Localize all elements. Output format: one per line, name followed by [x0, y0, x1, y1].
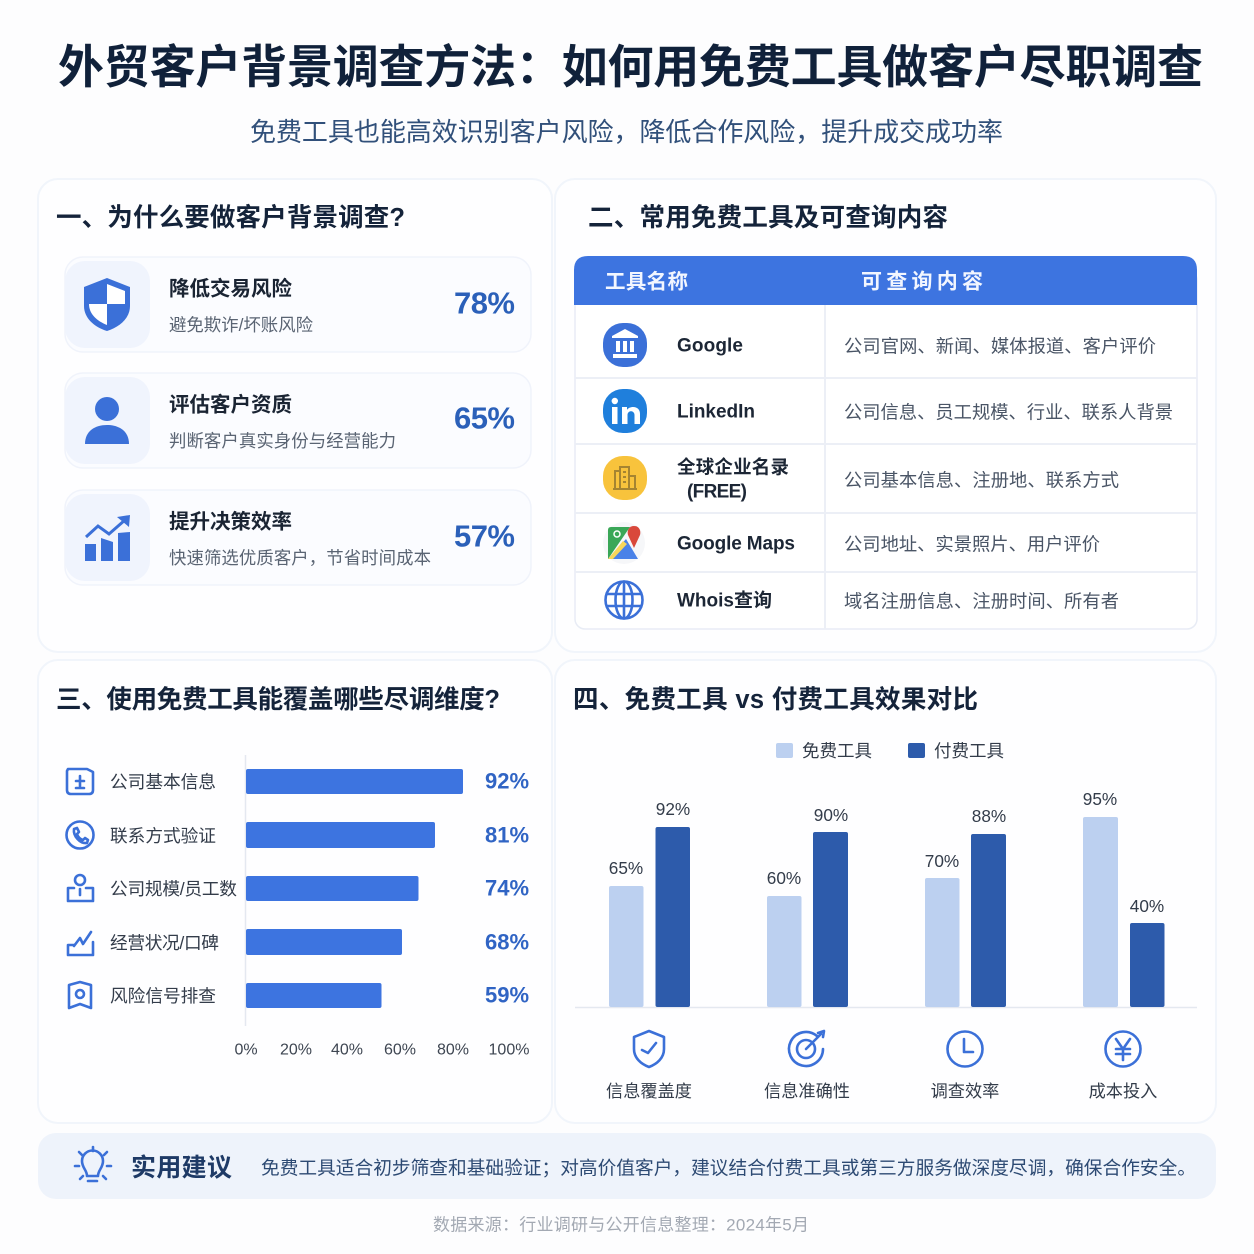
x axis labels	[234, 1042, 529, 1058]
x axis labels: 40%	[331, 1042, 363, 1058]
panel: due diligence coverage	[38, 660, 552, 1123]
grouped bar chart	[575, 789, 1197, 1008]
heading: section two: 二、常用免费工具及可查询内容	[588, 203, 948, 232]
x axis labels: 20%	[280, 1042, 312, 1058]
row: global directory: 公司基本信息、注册地、联系方式	[844, 470, 1119, 490]
bar: operations reputation	[68, 929, 529, 955]
legend: 免费工具	[802, 741, 872, 761]
table	[574, 256, 1197, 629]
card: reduce risk: 78%	[454, 286, 515, 320]
metric: cost	[1089, 1032, 1157, 1101]
bar: contact verification: 81%	[485, 822, 529, 848]
heading: section one: 一、为什么要做客户背景调查?	[56, 203, 405, 232]
card: assess qualification: 评估客户资质	[169, 392, 292, 416]
table: 可查询内容	[861, 270, 983, 294]
table: 工具名称	[605, 270, 688, 294]
icon: light bulb	[75, 1147, 111, 1181]
group: efficiency: 88%	[972, 806, 1006, 826]
row: Google: Google	[677, 336, 743, 356]
row: LinkedIn: LinkedIn	[677, 402, 755, 422]
horizontal bar chart	[66, 755, 529, 1058]
icon: growth chart	[85, 515, 130, 561]
group: efficiency: 70%	[925, 851, 959, 871]
row: Google	[603, 323, 1156, 367]
row: global directory: (FREE)	[687, 482, 747, 502]
card: assess qualification: 判断客户真实身份与经营能力	[169, 431, 396, 451]
bar: risk signals: 59%	[485, 982, 529, 1008]
bar: risk signals	[69, 982, 529, 1008]
panel: free vs paid	[555, 660, 1216, 1123]
card: reduce risk: 避免欺诈/坏账风险	[169, 315, 314, 335]
metric: accuracy: 信息准确性	[764, 1081, 850, 1101]
x axis labels: 0%	[234, 1042, 258, 1058]
panel: free tools table	[555, 179, 1216, 652]
group: cost: 95%	[1083, 789, 1117, 809]
row: Google Maps: 公司地址、实景照片、用户评价	[844, 534, 1100, 554]
row: Whois	[606, 581, 1119, 619]
card: assess qualification: 65%	[454, 400, 515, 436]
row: Whois: Whois查询	[677, 590, 772, 612]
title: 外贸客户背景调查方法：如何用免费工具做客户尽职调查	[58, 41, 1203, 93]
group: accuracy: 60%	[767, 868, 801, 888]
group: coverage: 65%	[609, 858, 643, 878]
card: decision efficiency	[65, 490, 531, 585]
callout: practical advice	[38, 1133, 1216, 1199]
group: efficiency	[925, 806, 1006, 1007]
row: Google Maps	[603, 522, 1100, 564]
group: cost	[1083, 789, 1164, 1007]
metric: accuracy	[764, 1031, 850, 1101]
group: coverage	[609, 799, 690, 1007]
metric: coverage: 信息覆盖度	[606, 1081, 692, 1101]
row: LinkedIn	[603, 389, 1173, 433]
card: decision efficiency: 57%	[454, 518, 515, 554]
row: global directory	[603, 456, 1119, 502]
x axis labels: 100%	[489, 1042, 529, 1058]
footer source: 数据来源：行业调研与公开信息整理：2024年5月	[433, 1216, 809, 1234]
heading: section three: 三、使用免费工具能覆盖哪些尽调维度?	[56, 686, 500, 714]
panel: why background checks	[38, 179, 552, 652]
metric: coverage	[606, 1031, 692, 1101]
group: cost: 40%	[1130, 896, 1164, 916]
icon: person	[85, 397, 129, 444]
bar: contact verification: 联系方式验证	[110, 826, 216, 846]
row: Google: 公司官网、新闻、媒体报道、客户评价	[844, 336, 1156, 356]
x axis labels: 80%	[437, 1042, 469, 1058]
bar: operations reputation: 经营状况/口碑	[110, 933, 219, 953]
bar: operations reputation: 68%	[485, 930, 529, 954]
row: Whois: 域名注册信息、注册时间、所有者	[844, 590, 1119, 612]
subtitle: 免费工具也能高效识别客户风险，降低合作风险，提升成交成功率	[250, 117, 1003, 147]
card: reduce risk: 降低交易风险	[169, 276, 292, 300]
row: Google Maps: Google Maps	[677, 534, 795, 554]
bar: company size	[68, 875, 529, 901]
bar: company size: 公司规模/员工数	[110, 879, 237, 899]
callout: practical advice: 免费工具适合初步筛查和基础验证；对高价值客户，建议结合付费工具或第三方服务做深度尽调，确保合作安全。	[261, 1158, 1196, 1178]
bar: company size: 74%	[485, 876, 529, 900]
row: global directory: 全球企业名录	[677, 456, 789, 478]
x axis labels: 60%	[384, 1042, 416, 1058]
card: reduce risk	[65, 257, 531, 352]
bar: company info: 92%	[485, 768, 529, 794]
card: assess qualification	[65, 373, 531, 468]
metric: efficiency: 调查效率	[931, 1081, 999, 1101]
callout: practical advice: 实用建议	[131, 1154, 232, 1182]
icon: shield	[84, 278, 130, 331]
row: LinkedIn: 公司信息、员工规模、行业、联系人背景	[844, 402, 1173, 422]
group: accuracy	[767, 805, 848, 1007]
bar: company info	[67, 768, 529, 794]
metric: efficiency	[931, 1032, 999, 1101]
bar: contact verification	[66, 822, 529, 848]
legend	[776, 741, 1004, 761]
bar: company info: 公司基本信息	[110, 772, 216, 792]
heading: section four: 四、免费工具 vs 付费工具效果对比	[573, 686, 978, 714]
card: decision efficiency: 提升决策效率	[169, 510, 292, 534]
legend: 付费工具	[934, 741, 1004, 761]
metric: cost: 成本投入	[1089, 1081, 1157, 1101]
group: coverage: 92%	[656, 799, 690, 819]
group: accuracy: 90%	[814, 805, 848, 825]
card: decision efficiency: 快速筛选优质客户，节省时间成本	[169, 548, 431, 568]
bar: risk signals: 风险信号排查	[110, 986, 216, 1006]
